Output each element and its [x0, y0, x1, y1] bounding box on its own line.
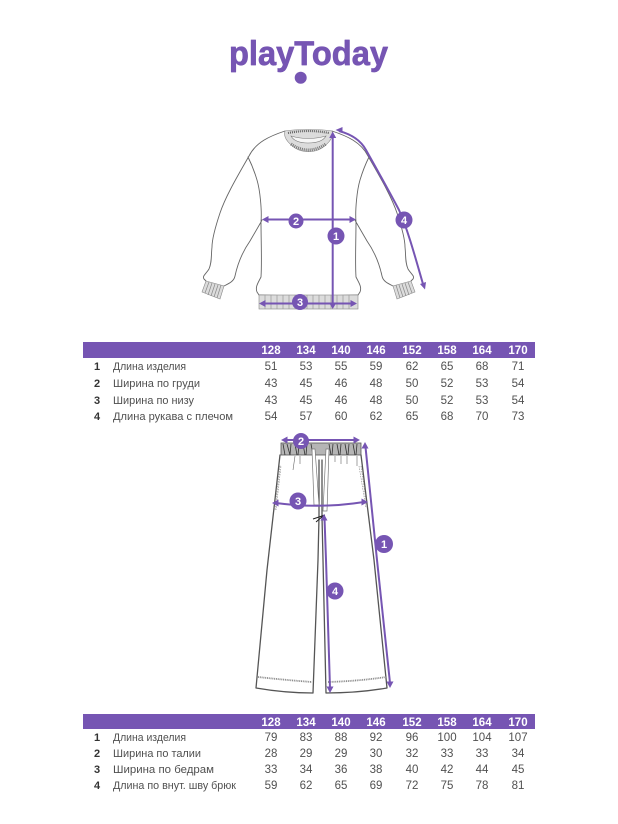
- row 2: 29: [335, 748, 347, 760]
- row 3: 3: [94, 395, 100, 407]
- row 2: 48: [370, 378, 382, 390]
- row 3: 43: [265, 395, 277, 407]
- elastic waistband: [281, 443, 361, 455]
- row 1: 62: [406, 361, 418, 373]
- row 1: 88: [335, 732, 347, 744]
- row 3: [94, 764, 524, 776]
- row 2: 46: [335, 378, 347, 390]
- trousers measurement arrow 2: waist width: 2: [298, 436, 304, 448]
- sweatshirt size table: 158: [437, 345, 457, 357]
- row 2: 52: [441, 378, 453, 390]
- row 3: 34: [300, 764, 313, 776]
- sweatshirt measurement arrow 3: hem width: 3: [297, 297, 303, 309]
- row 3: Ширина по бедрам: [113, 764, 214, 776]
- ribbed right cuff: [393, 281, 415, 299]
- row 4: 69: [370, 780, 382, 792]
- sweatshirt size table: 128: [261, 345, 281, 357]
- table header: [83, 342, 535, 358]
- row 3: 36: [335, 764, 347, 776]
- row 4: 60: [335, 411, 347, 423]
- row 4: 4: [94, 411, 101, 423]
- row 1: 79: [265, 732, 277, 744]
- row 2: 29: [300, 748, 312, 760]
- row 2: 33: [476, 748, 488, 760]
- row 4: 75: [441, 780, 453, 792]
- sweatshirt measurement arrow 2: chest width: 2: [293, 216, 299, 228]
- sweatshirt size table: 140: [331, 345, 351, 357]
- row 4: [94, 411, 524, 423]
- row 3: 52: [441, 395, 453, 407]
- row 1: 68: [476, 361, 488, 373]
- row 2: 32: [406, 748, 418, 760]
- row 4: 62: [300, 780, 312, 792]
- trousers measurement arrow 3: hip width: [272, 492, 368, 510]
- row 1: [94, 732, 528, 744]
- row 3: 54: [512, 395, 525, 407]
- row 4: Длина рукава с плечом: [113, 411, 233, 423]
- row 4: 57: [300, 411, 312, 423]
- sweatshirt body and sleeves outline: [203, 131, 285, 295]
- row 1: 71: [512, 361, 524, 373]
- side pockets: [275, 466, 367, 510]
- row 4: 72: [406, 780, 418, 792]
- waist gathers: [293, 456, 357, 470]
- trousers measurement arrow 2: waist width: [281, 433, 360, 449]
- sweatshirt size table: [83, 342, 535, 423]
- row 2: 50: [406, 378, 418, 390]
- row 1: 53: [300, 361, 312, 373]
- trousers measurement arrow 4: inseam length: [320, 514, 344, 693]
- trousers measurement arrow 3: hip width: 3: [295, 496, 301, 508]
- row 3: 40: [406, 764, 418, 776]
- sweatshirt measurement arrow 1: garment length: 1: [333, 231, 339, 243]
- row 3: 50: [406, 395, 418, 407]
- ribbed hem: [259, 295, 358, 309]
- row 3: 38: [370, 764, 382, 776]
- row 3: [94, 395, 525, 407]
- drawstrings: [312, 449, 329, 511]
- sweatshirt size table: 170: [508, 345, 528, 357]
- row 2: 45: [300, 378, 312, 390]
- row 4: 73: [512, 411, 524, 423]
- ribbed left cuff: [202, 281, 224, 299]
- trousers size table: [83, 714, 535, 792]
- row 4: 54: [265, 411, 278, 423]
- row 1: 92: [370, 732, 382, 744]
- trousers technical drawing: [256, 443, 387, 693]
- row 2: 33: [441, 748, 453, 760]
- row 4: 70: [476, 411, 488, 423]
- logo: playToday: playToday: [229, 35, 388, 73]
- trousers size table: 140: [331, 717, 351, 729]
- row 1: 83: [300, 732, 312, 744]
- sweatshirt size table: 164: [472, 345, 492, 357]
- row 2: 2: [94, 748, 100, 760]
- row 2: 53: [476, 378, 488, 390]
- trousers measurement arrow 1: garment length: [362, 442, 394, 688]
- trousers size table: 158: [437, 717, 457, 729]
- row 3: Ширина по низу: [113, 395, 194, 407]
- row 2: 28: [265, 748, 277, 760]
- trousers size table: 128: [261, 717, 281, 729]
- row 3: 45: [512, 764, 524, 776]
- sweatshirt size table: 152: [402, 345, 422, 357]
- sweatshirt measurement arrow 2: chest width: [262, 214, 356, 228]
- row 4: 78: [476, 780, 488, 792]
- trousers outline: [256, 455, 387, 693]
- row 2: Ширина по талии: [113, 748, 201, 760]
- sweatshirt technical drawing: [202, 130, 415, 309]
- row 1: 59: [370, 361, 382, 373]
- trousers size table: 152: [402, 717, 422, 729]
- trousers size table: 164: [472, 717, 492, 729]
- row 2: 34: [512, 748, 525, 760]
- row 1: 107: [508, 732, 528, 744]
- row 1: 1: [94, 732, 100, 744]
- row 4: [94, 780, 524, 792]
- sweatshirt measurement arrow 4: sleeve length: [336, 127, 426, 290]
- row 1: 104: [472, 732, 492, 744]
- row 2: [94, 748, 525, 760]
- row 4: Длина по внут. шву брюк: [113, 780, 236, 792]
- trousers size table: 134: [296, 717, 316, 729]
- table header: [83, 714, 535, 729]
- row 1: Длина изделия: [113, 361, 186, 373]
- row 3: 44: [476, 764, 489, 776]
- row 2: 43: [265, 378, 277, 390]
- row 4: 59: [265, 780, 277, 792]
- row 2: 30: [370, 748, 382, 760]
- trousers size table: 170: [508, 717, 528, 729]
- sweatshirt measurement arrow 4: sleeve length: 4: [401, 215, 408, 227]
- row 1: 55: [335, 361, 347, 373]
- crotch stitch: [313, 515, 325, 522]
- ribbed collar: [285, 130, 332, 152]
- row 3: 45: [300, 395, 312, 407]
- row 2: 54: [512, 378, 525, 390]
- row 4: 4: [94, 780, 101, 792]
- row 3: 53: [476, 395, 488, 407]
- row 2: Ширина по груди: [113, 378, 200, 390]
- row 3: 33: [265, 764, 277, 776]
- row 3: 48: [370, 395, 382, 407]
- row 4: 65: [406, 411, 418, 423]
- row 1: Длина изделия: [113, 732, 186, 744]
- row 1: 96: [406, 732, 418, 744]
- row 4: 68: [441, 411, 453, 423]
- row 1: [94, 361, 524, 373]
- row 1: 100: [437, 732, 457, 744]
- row 3: 42: [441, 764, 453, 776]
- row 2: [94, 378, 525, 390]
- sweatshirt measurement arrow 3: hem width: [259, 294, 357, 310]
- row 1: 65: [441, 361, 453, 373]
- trousers measurement arrow 1: garment length: 1: [381, 539, 387, 551]
- row 4: 81: [512, 780, 524, 792]
- row 2: 2: [94, 378, 100, 390]
- row 4: 62: [370, 411, 382, 423]
- hem stitching: [258, 677, 386, 682]
- trousers size table: 146: [366, 717, 386, 729]
- trousers measurement arrow 4: inseam length: 4: [332, 586, 339, 598]
- sweatshirt size table: 134: [296, 345, 316, 357]
- row 3: 46: [335, 395, 347, 407]
- row 3: 3: [94, 764, 100, 776]
- row 4: 65: [335, 780, 347, 792]
- row 1: 51: [265, 361, 277, 373]
- row 1: 1: [94, 361, 100, 373]
- sweatshirt size table: 146: [366, 345, 386, 357]
- sweatshirt measurement arrow 1: garment length: [328, 132, 344, 309]
